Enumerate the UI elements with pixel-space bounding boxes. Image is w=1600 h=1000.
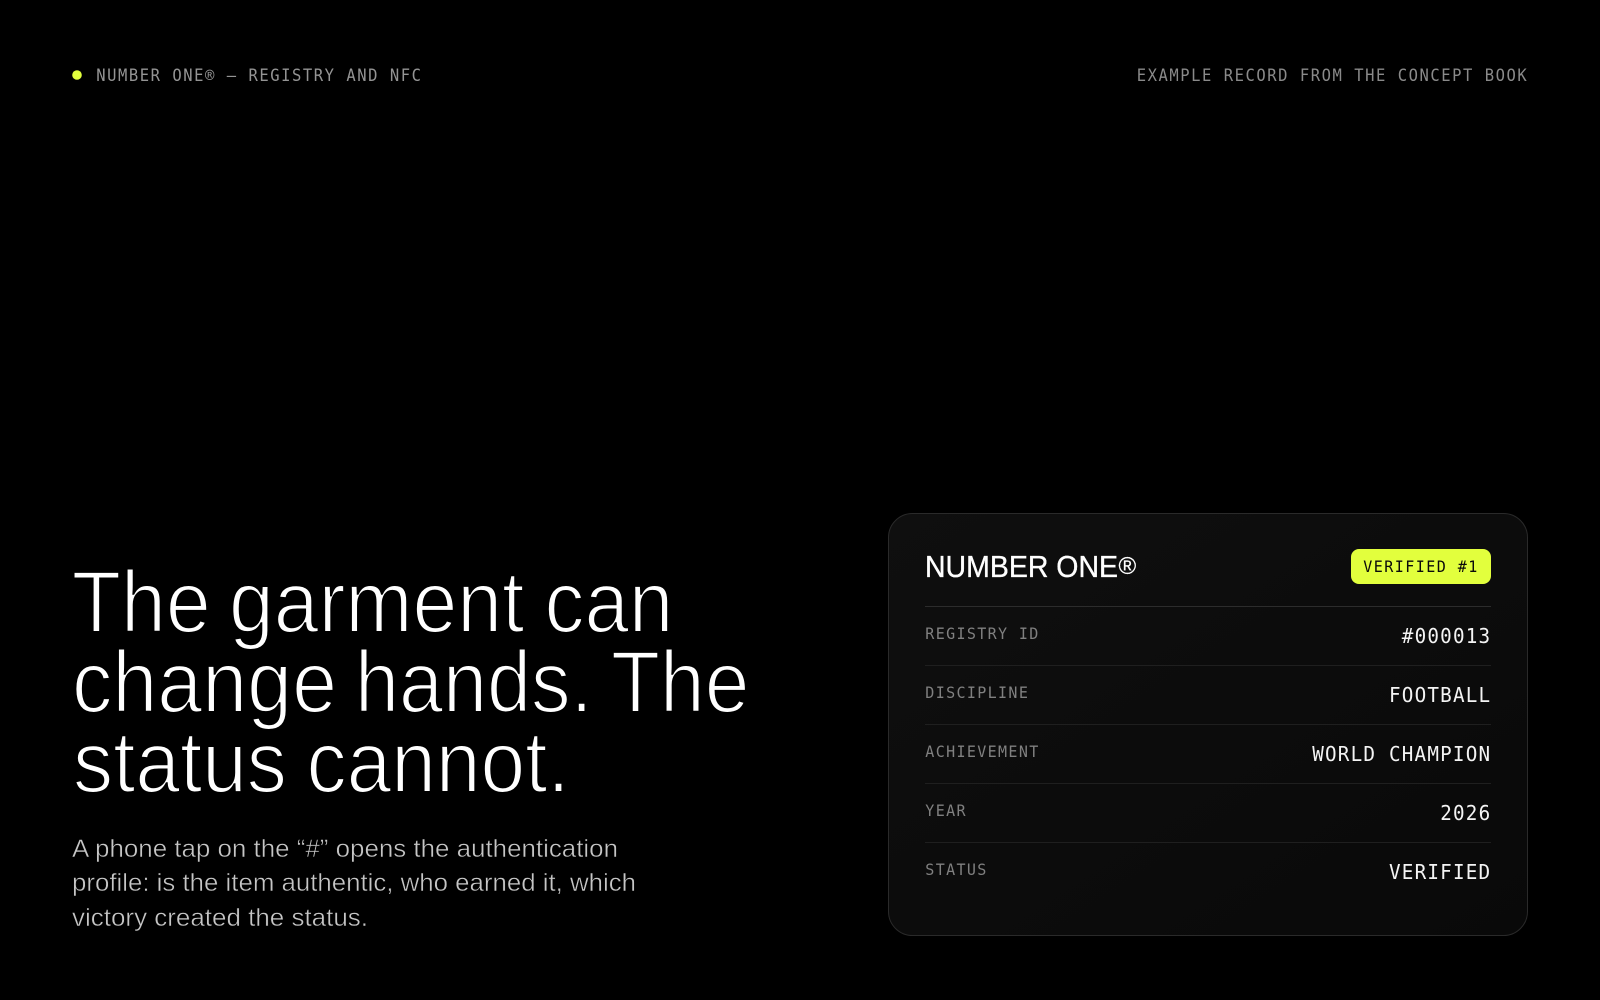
row: registry id: REGISTRY ID: [925, 625, 1040, 643]
supporting paragraph: victory created the status.: [72, 904, 368, 932]
supporting paragraph: A phone tap on the “#” opens the authentication: [72, 835, 618, 863]
row: discipline: DISCIPLINE: [925, 684, 1029, 702]
card title: NUMBER ONE: [925, 550, 1118, 584]
headline: The: [72, 554, 211, 651]
supporting paragraph: profile: is the item authentic, who earned it, which: [72, 869, 636, 897]
supporting paragraph: [72, 835, 636, 932]
panel: registry record card: [888, 514, 1528, 936]
headline: The: [611, 634, 749, 731]
row: discipline: [925, 683, 1491, 707]
row: status: [925, 860, 1491, 884]
headline: cannot.: [306, 714, 570, 811]
row: year: [925, 801, 1491, 825]
card title: ®: [1118, 553, 1136, 580]
row: year: YEAR: [925, 802, 967, 820]
verified badge: VERIFIED #1: [1363, 558, 1479, 576]
row: status: VERIFIED: [1389, 860, 1491, 884]
row: achievement: WORLD CHAMPION: [1312, 742, 1491, 766]
header left: brand label: [72, 66, 422, 85]
row: registry id: #000013: [1402, 624, 1491, 648]
headline: garment: [229, 554, 524, 651]
headline: [72, 554, 749, 811]
header label text: NUMBER ONE® — REGISTRY AND NFC: [96, 66, 422, 85]
icon: lime status dot: [72, 70, 82, 80]
headline: change: [72, 634, 337, 731]
verified badge: [1351, 549, 1491, 584]
row: achievement: ACHIEVEMENT: [925, 743, 1040, 761]
headline: hands.: [355, 634, 593, 731]
header right: context note: EXAMPLE RECORD FROM THE CONCEPT BOOK: [1137, 66, 1528, 85]
row: status: STATUS: [925, 861, 988, 879]
headline: status: [73, 714, 287, 811]
row: year: 2026: [1440, 801, 1491, 825]
row: achievement: [925, 742, 1491, 766]
row: registry id: [925, 624, 1491, 648]
headline: can: [544, 554, 673, 651]
row: discipline: FOOTBALL: [1389, 683, 1491, 707]
